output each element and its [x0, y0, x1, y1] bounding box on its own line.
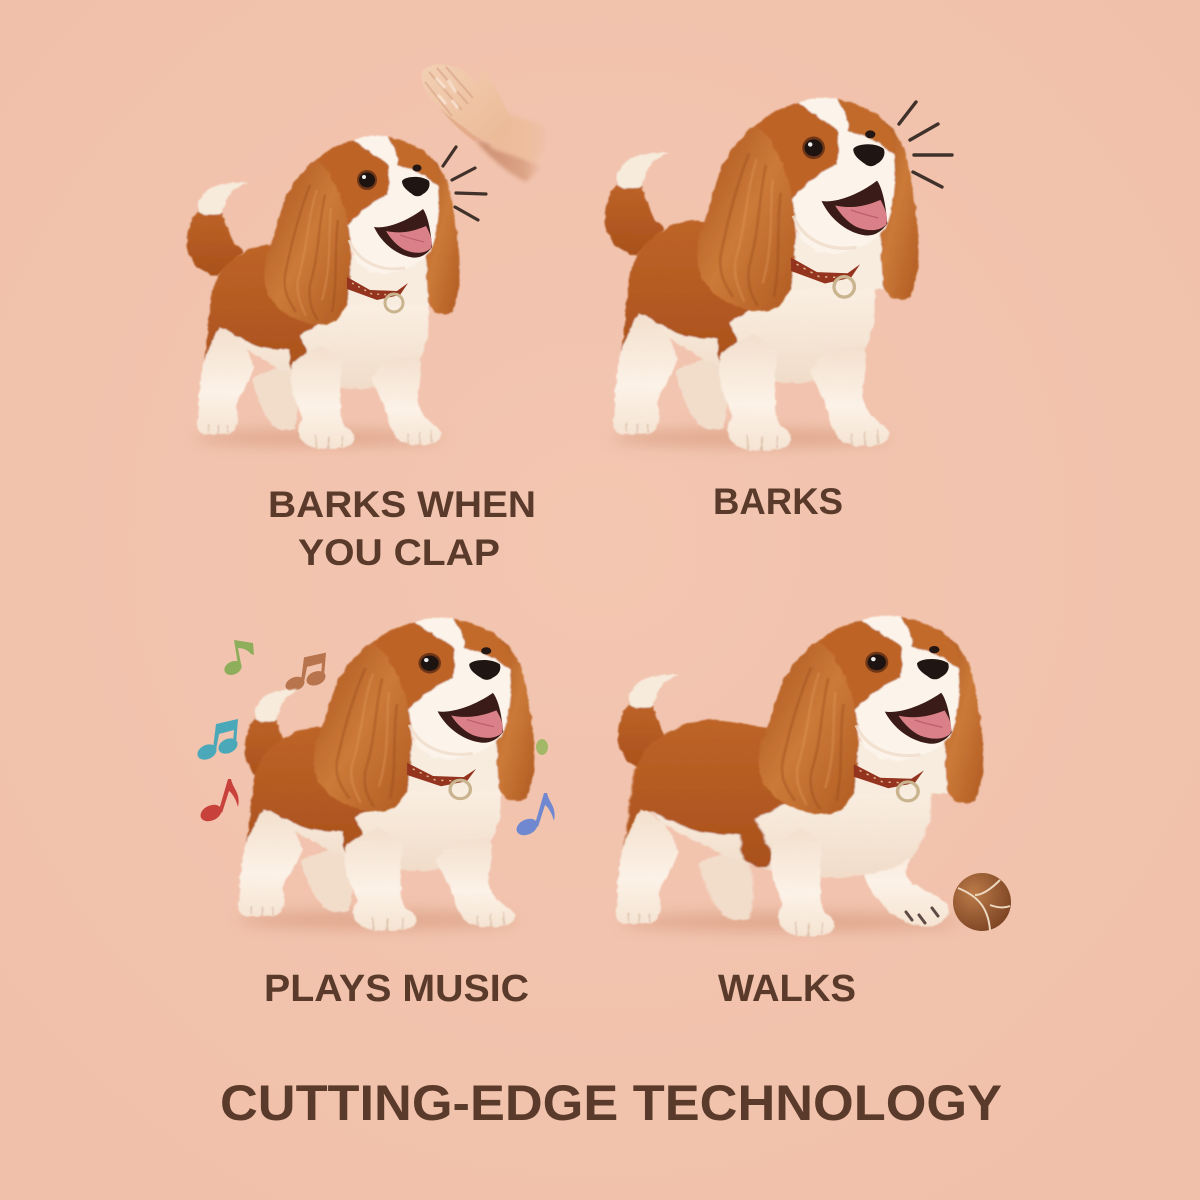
- dog: barks: [605, 97, 919, 451]
- caption: barks when you clap: [268, 484, 536, 573]
- green note: [222, 640, 254, 678]
- ground shadows: [195, 429, 960, 931]
- tail: [187, 183, 248, 276]
- music notes: [195, 640, 555, 838]
- caption: barks: BARKS: [713, 481, 843, 522]
- front leg: [770, 827, 835, 937]
- tail: [605, 153, 669, 256]
- face features and collar: [337, 647, 503, 807]
- body and legs: [197, 245, 442, 449]
- icon: bark lines, dog two: [899, 102, 952, 187]
- face features and collar: [782, 646, 952, 809]
- torso: [623, 720, 932, 878]
- head fur with ears: [314, 617, 534, 811]
- tail: [245, 690, 300, 783]
- face features and collar: [285, 164, 432, 320]
- dog: walks: [616, 615, 983, 937]
- blue note: [514, 793, 555, 838]
- tail: [618, 675, 679, 771]
- red note: [198, 779, 239, 824]
- face features and collar: [720, 130, 887, 306]
- body and legs: [613, 220, 890, 451]
- dog: barks when you clap: [187, 135, 460, 449]
- rear leg: [616, 809, 678, 924]
- icon: bark lines, dog one: [443, 147, 486, 220]
- dog: plays music: [238, 617, 534, 931]
- partial green note: [536, 739, 548, 755]
- icon: ball: [953, 873, 1011, 931]
- body and legs: [238, 727, 516, 931]
- extended front paw: [862, 815, 948, 927]
- caption: plays music: PLAYS MUSIC: [264, 968, 529, 1010]
- title: CUTTING-EDGE TECHNOLOGY: [220, 1075, 1002, 1131]
- head fur with ears: [759, 615, 983, 814]
- caption: walks: WALKS: [718, 968, 856, 1010]
- brown note: [283, 653, 328, 694]
- head fur with ears: [697, 97, 919, 311]
- rear inner leg: [700, 848, 753, 920]
- caption: barks when you clap: BARKS WHEN: [268, 484, 536, 525]
- icon: clapping hands: [422, 65, 546, 182]
- head fur with ears: [264, 135, 460, 325]
- teal note: [195, 719, 240, 763]
- caption: barks when you clap: YOU CLAP: [298, 532, 500, 573]
